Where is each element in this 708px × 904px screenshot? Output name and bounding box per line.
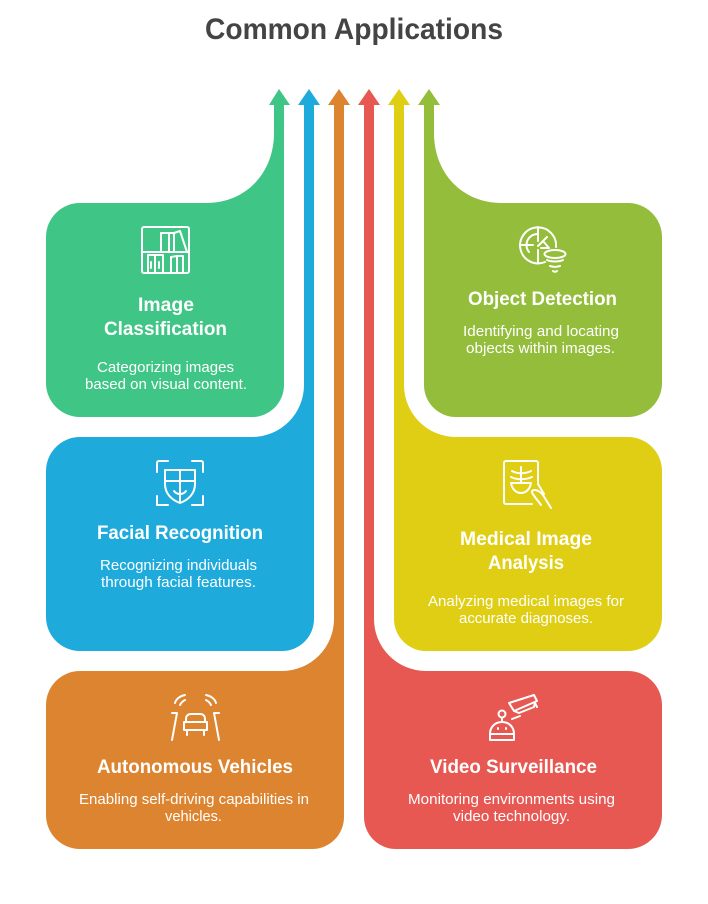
description: based on visual content. bbox=[85, 377, 247, 393]
icon: face scan bbox=[157, 461, 203, 505]
icon: radar and funnel bbox=[520, 227, 566, 272]
heading: Medical Image bbox=[460, 529, 592, 550]
heading: Object Detection bbox=[468, 289, 617, 310]
description: Analyzing medical images for bbox=[428, 594, 624, 610]
description: Enabling self-driving capabilities in bbox=[79, 792, 309, 808]
icon: robot and camera bbox=[490, 695, 537, 740]
arrow shape: orange card bbox=[46, 89, 350, 849]
panel: medical image analysis bbox=[388, 89, 662, 651]
panel: autonomous vehicles bbox=[46, 89, 350, 849]
description: Categorizing images bbox=[97, 360, 234, 376]
description: Identifying and locating bbox=[463, 324, 619, 340]
arrow shape: green card bbox=[46, 89, 290, 417]
description bbox=[100, 558, 257, 591]
heading: Autonomous Vehicles bbox=[97, 757, 293, 778]
panel: video surveillance bbox=[358, 89, 662, 849]
description: Monitoring environments using bbox=[408, 792, 615, 808]
heading: Facial Recognition bbox=[97, 523, 263, 544]
description: video technology. bbox=[453, 809, 570, 825]
panel: object detection bbox=[418, 89, 662, 417]
heading bbox=[104, 295, 227, 340]
arrow shape: olive card bbox=[418, 89, 662, 417]
description: vehicles. bbox=[165, 809, 222, 825]
heading: Image bbox=[138, 295, 194, 316]
description bbox=[463, 324, 619, 357]
description: objects within images. bbox=[466, 341, 615, 357]
arrow shape: blue card bbox=[46, 89, 320, 651]
description: through facial features. bbox=[101, 575, 256, 591]
description bbox=[79, 792, 309, 825]
heading: Analysis bbox=[488, 553, 564, 574]
arrow shape: red card bbox=[358, 89, 662, 849]
arrow shape: yellow card bbox=[388, 89, 662, 651]
panel: image classification bbox=[46, 89, 290, 417]
icon: bookshelf bbox=[142, 227, 189, 273]
panel: facial recognition bbox=[46, 89, 320, 651]
title: Common Applications bbox=[205, 13, 503, 46]
heading: Classification bbox=[104, 319, 227, 340]
description: accurate diagnoses. bbox=[459, 611, 593, 627]
description: Recognizing individuals bbox=[100, 558, 257, 574]
description bbox=[85, 360, 247, 393]
description bbox=[408, 792, 615, 825]
description bbox=[428, 594, 624, 627]
heading bbox=[460, 529, 592, 574]
heading: Video Surveillance bbox=[430, 757, 597, 778]
icon: x-ray in hand bbox=[504, 461, 551, 508]
icon: car with sensors bbox=[172, 695, 219, 740]
